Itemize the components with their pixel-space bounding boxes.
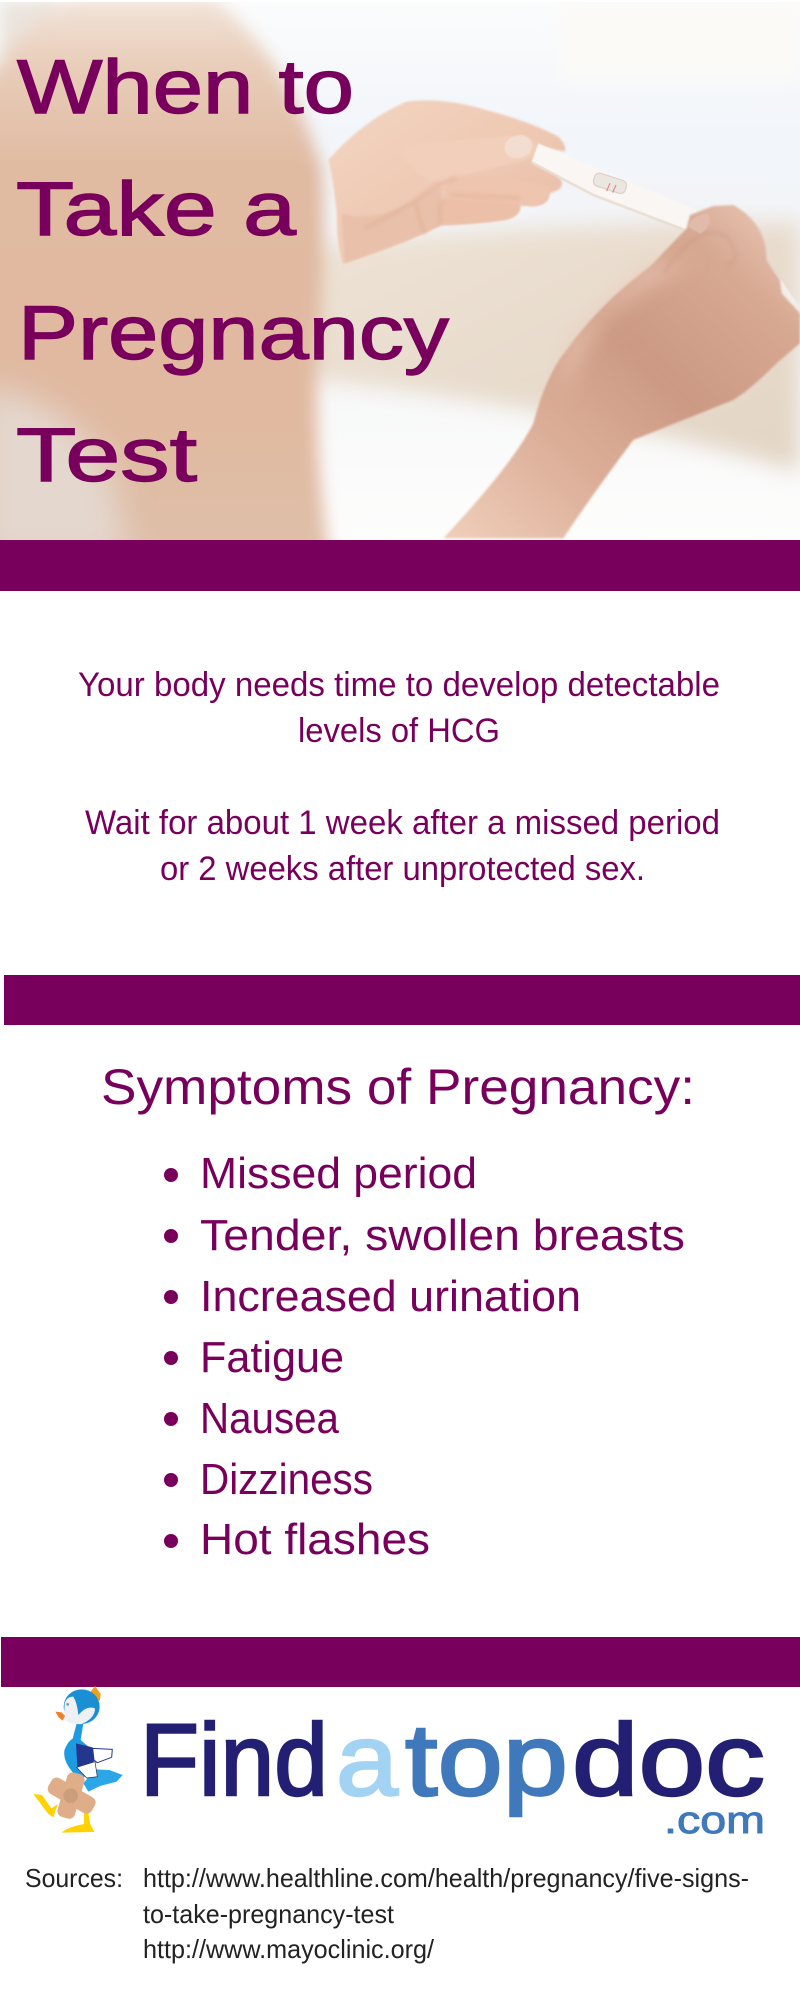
item: missed period: Missed period: [200, 1149, 477, 1198]
sources: [25, 1863, 749, 1964]
beak: [55, 1712, 65, 1721]
hero photo: hands holding a pregnancy test: [0, 0, 800, 560]
intro line 3: Wait for about 1 week after a missed period: [85, 804, 720, 842]
test stick: [532, 143, 698, 229]
source line 3: http://www.mayoclinic.org/: [143, 1934, 435, 1964]
logo word: doc: doc: [572, 1703, 765, 1817]
logo: Findatopdoc.com: [140, 1703, 765, 1842]
sources label: Sources:: [25, 1863, 123, 1893]
item: tender breasts: Tender, swollen breasts: [200, 1211, 685, 1260]
beige background band: [300, 222, 800, 472]
dark chest: [76, 1743, 94, 1767]
logo word: a: a: [336, 1703, 398, 1817]
source line 1: http://www.healthline.com/health/pregnancy/five-signs-: [143, 1863, 749, 1893]
icon: duck mascot with bandage: [33, 1686, 123, 1833]
item: hot flashes: Hot flashes: [200, 1515, 430, 1564]
right hand: [443, 205, 800, 538]
front leg and foot: [62, 1810, 94, 1833]
logo suffix: .com: .com: [664, 1800, 765, 1842]
item: nausea: Nausea: [200, 1394, 339, 1443]
title line 1: When to: [17, 45, 354, 130]
back foot: [33, 1794, 58, 1817]
item: dizziness: Dizziness: [200, 1455, 373, 1504]
bandage: [46, 1771, 98, 1820]
divider bar 3: [1, 1637, 800, 1687]
white wing: [93, 1748, 112, 1763]
neck and body: [64, 1723, 88, 1778]
title line 3: Pregnancy: [18, 291, 449, 376]
logo word: top: top: [405, 1703, 568, 1817]
crown: [91, 1686, 101, 1701]
symptoms heading: Symptoms of Pregnancy:: [101, 1059, 695, 1115]
source line 2: to-take-pregnancy-test: [143, 1899, 395, 1929]
item: increased urination: Increased urination: [200, 1272, 581, 1321]
blurred shoulder: [0, 0, 330, 560]
item: fatigue: Fatigue: [200, 1333, 344, 1382]
intro line 4: or 2 weeks after unprotected sex.: [160, 850, 645, 888]
intro line 1: Your body needs time to develop detectable: [78, 666, 720, 704]
intro text: [78, 666, 720, 888]
divider bar 2: [4, 975, 800, 1025]
intro line 2: levels of HCG: [298, 712, 500, 750]
head: [64, 1689, 100, 1724]
title line 4: Test: [16, 413, 197, 498]
title line 2: Take a: [16, 167, 297, 252]
left hand: [328, 100, 565, 264]
title: [16, 45, 449, 498]
logo word: Find: Find: [140, 1703, 328, 1817]
divider bar 1: [0, 540, 800, 591]
symptoms list: [164, 1149, 685, 1564]
tail: [83, 1769, 123, 1792]
